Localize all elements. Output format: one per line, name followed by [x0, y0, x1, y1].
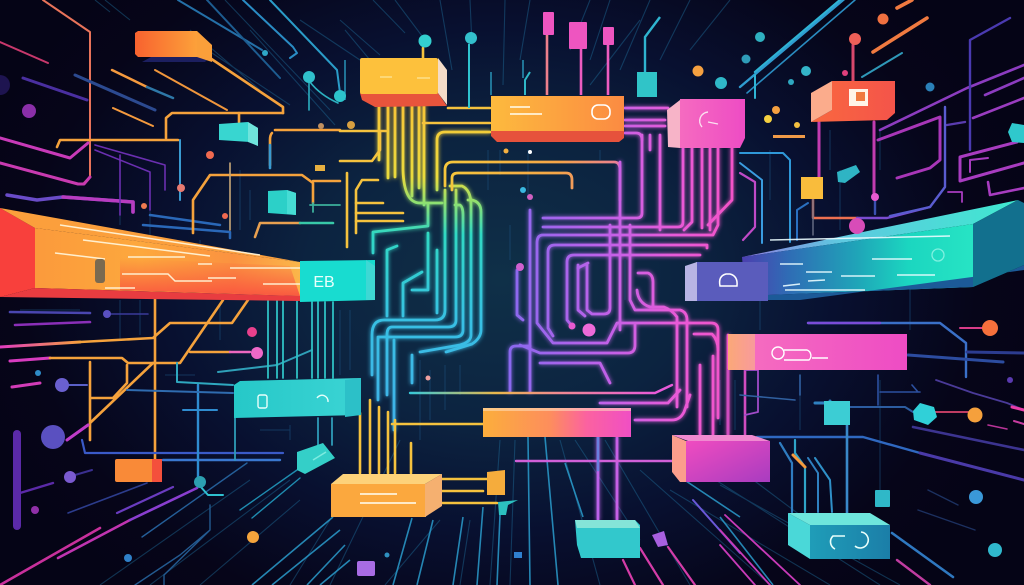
block: central teal with EB label: EB	[313, 274, 335, 291]
block: teal small lower right	[875, 490, 890, 507]
block: pink top	[667, 99, 745, 148]
block: small teal connector	[498, 500, 518, 515]
right-side traces	[728, 0, 1024, 585]
block: teal square right	[824, 401, 850, 425]
block: teal near orange	[297, 443, 335, 474]
pins above center blocks	[345, 17, 660, 108]
block: orange bottom center	[331, 474, 442, 517]
upper-left orange circuit	[57, 58, 340, 237]
block: teal bottom right	[788, 513, 890, 559]
block: violet blob	[652, 531, 668, 547]
block: oblong teal right	[837, 165, 860, 183]
block: small yellow right	[801, 177, 823, 199]
lower-left circuit	[0, 298, 333, 585]
block: small orange connector	[487, 470, 505, 495]
central magenta and violet bus	[510, 108, 732, 520]
upper-left streaks and traces	[0, 0, 340, 238]
block: top-right red-orange	[811, 81, 895, 122]
long orange wires across center	[445, 162, 620, 200]
block: indigo	[685, 262, 768, 301]
horizontal wires below bus	[410, 385, 800, 585]
block: teal bottom center	[575, 520, 640, 558]
block: teal lower-left	[234, 378, 361, 418]
beam: left gradient bar	[0, 208, 300, 301]
block: top-left orange	[135, 31, 212, 62]
block: long center orange	[491, 96, 624, 142]
central rainbow bus	[372, 105, 490, 430]
block: central teal with EB label	[300, 260, 375, 302]
block: small teal top	[637, 72, 657, 97]
block: pink lower	[672, 435, 770, 482]
block: small teal upper-left	[219, 122, 258, 146]
block: teal hex right	[913, 403, 937, 425]
blocks: pink top pins	[543, 12, 614, 49]
block: top yellow-orange	[360, 58, 447, 107]
block: violet bottom	[357, 561, 375, 576]
block: orange lower-left	[115, 459, 162, 482]
block: long orange-pink center	[483, 408, 631, 437]
block: hex teal far right	[1008, 123, 1024, 143]
block: small teal center-left	[268, 190, 296, 215]
yellow left stubs and block connectors	[340, 48, 497, 503]
block: long pink right	[728, 334, 907, 370]
beam: right gradient bar	[742, 200, 1024, 300]
